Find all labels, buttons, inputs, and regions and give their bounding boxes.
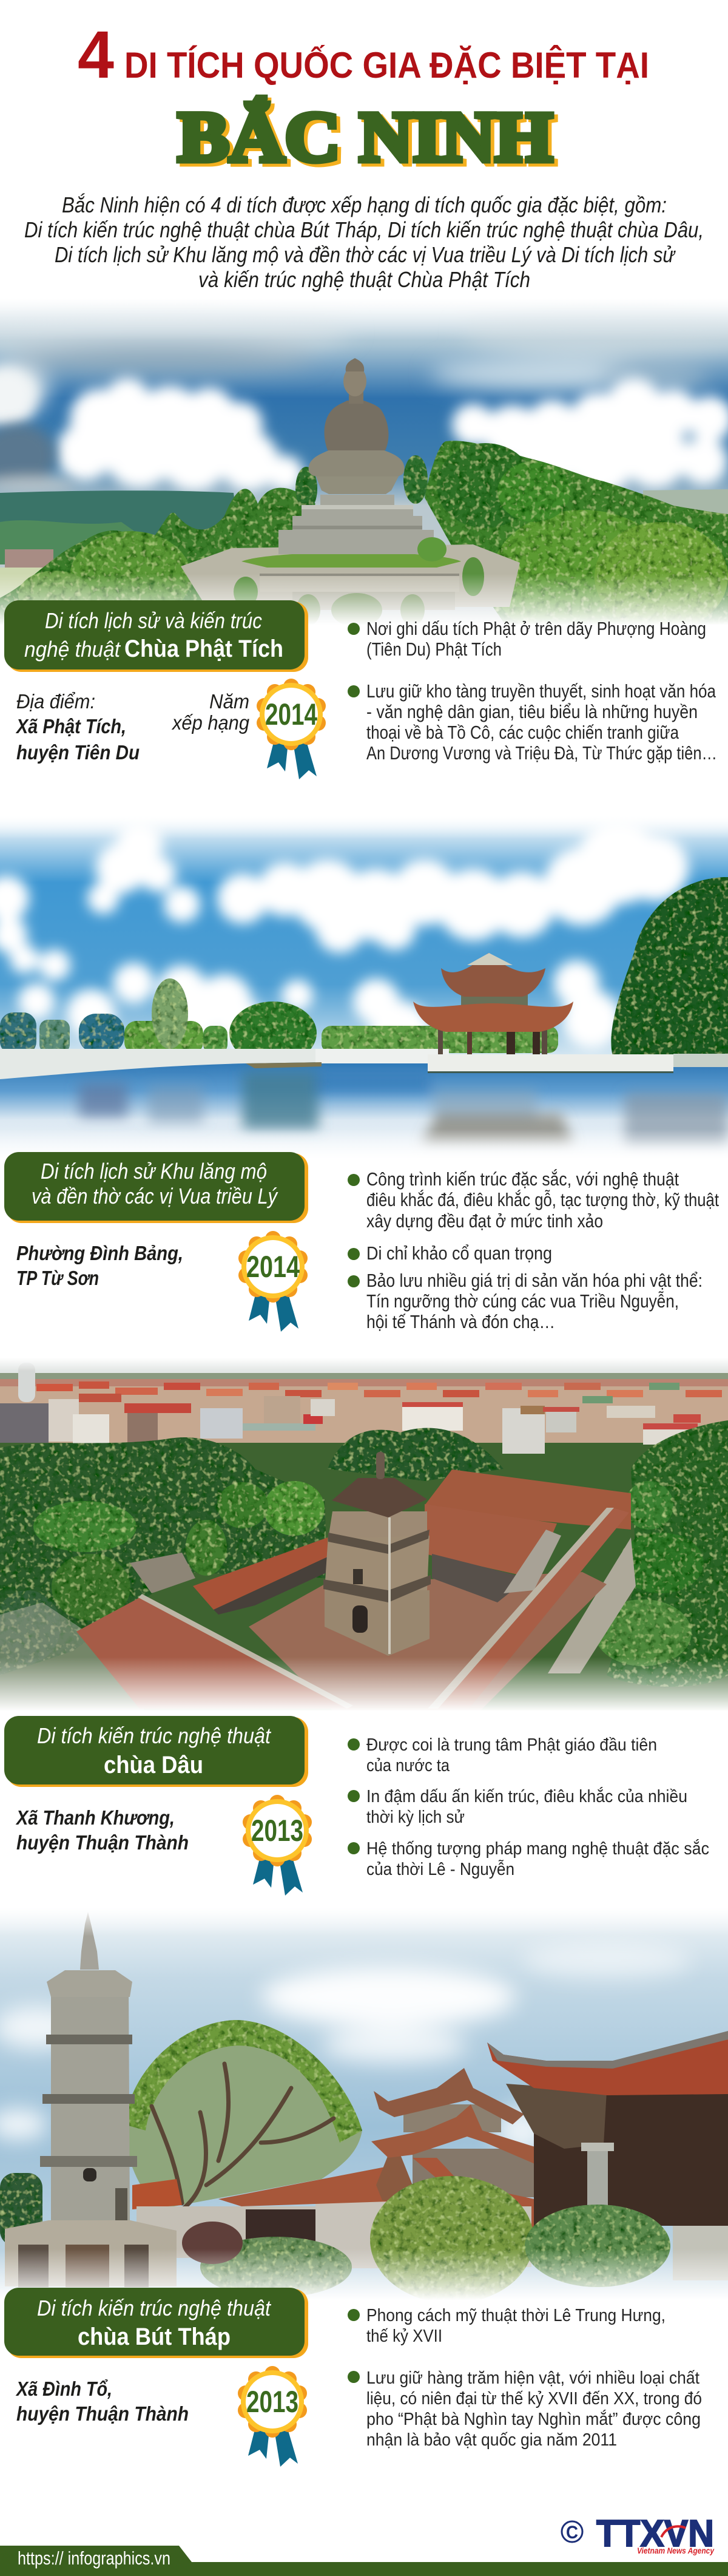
photo: Lý dynasty temple pavilion and lake: [0, 815, 728, 1179]
bullet list: hội tế Thánh và đón chạ…: [366, 1311, 555, 1332]
ranking year label: xếp hạng: [171, 711, 250, 734]
panel: Chùa Dâu: [4, 1716, 709, 1896]
town houses: [0, 1366, 728, 1454]
card: Chùa Dâu heading: chùa Dâu: [104, 1752, 203, 1778]
right wall: [437, 1508, 629, 1709]
right main hall roofs: [425, 1469, 631, 1530]
bullet list: Phong cách mỹ thuật thời Lê Trung Hưng,: [366, 2306, 666, 2325]
bullet list: nhận là bảo vật quốc gia năm 2011: [366, 2430, 617, 2450]
bullet list: pho “Phật bà Nghìn tay Nghìn mắt” được công: [366, 2409, 701, 2429]
ranking year label: [171, 690, 250, 734]
clouds: [0, 819, 689, 1062]
title: first line: DI TÍCH QUỐC GIA ĐẶC BIỆT TẠI: [124, 45, 649, 86]
footer bar: https:// infographics.vn: [18, 2547, 170, 2569]
bullet list: [348, 1168, 719, 1332]
trees: [0, 1420, 728, 1687]
ranking year label: Năm: [209, 690, 249, 713]
tower: [323, 1452, 431, 1656]
icon: medal 2013: [238, 2366, 307, 2467]
icon: medal 2014: [257, 679, 326, 779]
grey ground: [0, 1602, 135, 1704]
photo: Chùa Dâu tower aerial view: [0, 1358, 728, 1718]
intro paragraph: và kiến trúc nghệ thuật Chùa Phật Tích: [198, 267, 530, 292]
location: Địa điểm:: [16, 690, 95, 713]
card: Lý dynasty heading: [4, 1152, 308, 1223]
cumulus clouds: [0, 367, 728, 495]
white fence and embankment: [0, 1049, 322, 1079]
card: Chùa Phật Tích heading: nghệ thuật: [24, 637, 121, 662]
card: Lý dynasty heading: Di tích lịch sử Khu lăng mộ: [41, 1159, 267, 1184]
logo: TTXVN: C: [566, 2523, 578, 2543]
plumeria tree canopy: [124, 2020, 362, 2209]
title: number 4: 4: [78, 18, 114, 92]
bottom left big roof: [76, 1596, 353, 1709]
bullet list: liệu, có niên đại từ thế kỷ XVII đến XX, trong đó: [366, 2389, 702, 2408]
icon: medal 2013: [243, 1795, 312, 1896]
location: Xã Đình Tổ,: [15, 2378, 112, 2400]
icon: medal 2014: 2014: [246, 1250, 300, 1284]
orange roof behind tree: [132, 2179, 182, 2209]
location: [15, 1806, 189, 1854]
front roof: [218, 2167, 408, 2206]
left background tree: [0, 2158, 640, 2246]
card: Chùa Phật Tích heading: Di tích lịch sử và kiến trúc: [45, 608, 262, 633]
location: [15, 2378, 189, 2425]
tower stupa: [5, 1912, 177, 2287]
bullet list: Được coi là trung tâm Phật giáo đầu tiên: [366, 1735, 657, 1755]
buddha: [309, 358, 404, 494]
logo: TTXVN: TTXVN: [596, 2513, 714, 2555]
title: Bắc Ninh: NINH: [363, 100, 556, 180]
location: huyện Thuận Thành: [16, 1831, 189, 1854]
card: Chùa Bút Tháp heading: [4, 2288, 308, 2358]
bullet list: Di chỉ khảo cổ quan trọng: [366, 1242, 552, 1264]
title: Bắc Ninh: NINH: [359, 97, 553, 177]
logo: TTXVN: Vietnam News Agency: [637, 2546, 715, 2555]
location: huyện Thuận Thành: [16, 2402, 189, 2425]
location: Xã Thanh Khương,: [15, 1806, 175, 1829]
bullet list: thời kỳ lịch sử: [366, 1808, 465, 1827]
location: [16, 1242, 183, 1289]
water: [0, 1062, 728, 1147]
title: Bắc Ninh: BẮC: [181, 100, 344, 180]
bullet list: thế kỷ XVII: [366, 2327, 442, 2346]
bullet list: [348, 2306, 702, 2450]
tree line: [0, 877, 728, 1065]
card: Chùa Bút Tháp heading: chùa Bút Tháp: [78, 2323, 231, 2350]
card: Chùa Bút Tháp heading: Di tích kiến trúc nghệ thuật: [37, 2296, 272, 2320]
card: Lý dynasty heading: và đền thờ các vị Vua triều Lý: [32, 1184, 278, 1208]
pavilion: [413, 953, 573, 1054]
bushes: [200, 2176, 670, 2303]
location: Xã Phật Tích,: [15, 715, 126, 737]
location: huyện Tiên Du: [16, 741, 140, 764]
white wall: [136, 2206, 318, 2258]
middle tower: [403, 2104, 501, 2132]
bullet list: [348, 618, 717, 764]
bullet list: Hệ thống tượng pháp mang nghệ thuật đặc sắc: [366, 1839, 709, 1859]
distant hills: [0, 490, 234, 535]
icon: medal 2014: [238, 1231, 308, 1332]
icon: medal 2014: 2014: [265, 697, 317, 731]
panel: Chùa Phật Tích: [4, 600, 717, 779]
left corridor: [193, 1537, 328, 1610]
bullet list: Tín ngưỡng thờ cúng các vua Triều Nguyễn,: [366, 1290, 679, 1312]
bullet list: Công trình kiến trúc đặc sắc, với nghệ thuật: [366, 1168, 679, 1190]
card: Chùa Phật Tích heading: [4, 600, 308, 672]
bullet list: In đậm dấu ấn kiến trúc, điêu khắc của nhiều: [366, 1786, 687, 1806]
bullet list: xây dựng đều đạt ở mức tinh xảo: [366, 1210, 603, 1232]
bullet list: của thời Lê - Nguyễn: [366, 1859, 514, 1879]
panel: Khu lăng mộ và đền thờ các vị Vua triều Lý: [4, 1152, 719, 1332]
card: Chùa Dâu heading: Di tích kiến trúc nghệ thuật: [37, 1723, 272, 1748]
title: Bắc Ninh: [178, 97, 556, 180]
card: Chùa Dâu heading: [4, 1716, 308, 1787]
location: TP Từ Sơn: [16, 1267, 99, 1289]
bullet list: [348, 1735, 709, 1879]
courtyard: [249, 1572, 607, 1718]
location: [15, 690, 140, 764]
card: Chùa Phật Tích heading: Chùa Phật Tích: [124, 636, 283, 662]
bullet list: của nước ta: [366, 1756, 450, 1775]
icon: medal 2013: 2013: [246, 2385, 298, 2419]
title: [78, 18, 649, 92]
bullet list: Lưu giữ hàng trăm hiện vật, với nhiều loại chất: [366, 2368, 699, 2388]
icon: medal 2013: 2013: [251, 1814, 303, 1848]
tree covered hill: [0, 441, 728, 643]
stupa base and balustrade: [181, 495, 520, 627]
footer bar: [0, 2546, 728, 2576]
photo: Chùa Bút Tháp tower and roofs: [0, 1906, 728, 2309]
photo: Phật Tích Buddha statue: [0, 298, 728, 643]
bullet list: (Tiên Du) Phật Tích: [366, 639, 502, 660]
title: Bắc Ninh: BẮC: [178, 97, 340, 177]
panel: Chùa Bút Tháp: [4, 2288, 702, 2467]
big right hall: [534, 2094, 728, 2226]
location: Phường Đình Bảng,: [16, 1242, 183, 1264]
intro paragraph: [24, 192, 704, 292]
